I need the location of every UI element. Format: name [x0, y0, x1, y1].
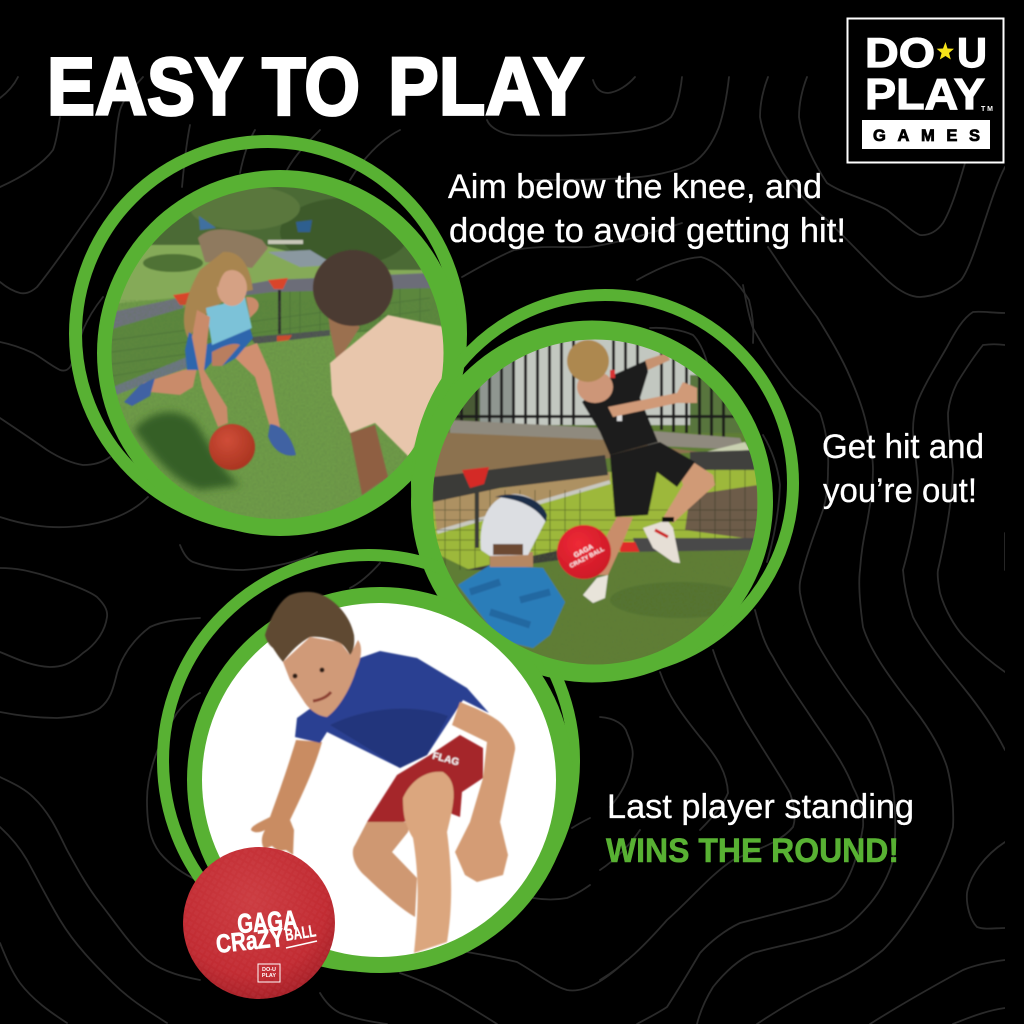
- text: aim below the knee: Aim below the knee, and: [448, 168, 822, 206]
- girl hair back: [184, 252, 253, 338]
- man neck: [328, 318, 360, 358]
- bottom outer ring: [163, 555, 574, 966]
- back arm: [251, 740, 322, 855]
- shorts: [367, 735, 483, 822]
- back leg: [353, 822, 417, 917]
- net: [108, 287, 445, 392]
- foreground grass: [117, 335, 330, 396]
- panel: boy dodging photo: [430, 330, 770, 670]
- hair: [265, 592, 354, 662]
- shorts: [610, 442, 695, 517]
- panel: boy dodging photo: GAGA: [573, 544, 595, 560]
- text: last player standing: [606, 788, 914, 870]
- logo: PLAY: [865, 70, 985, 119]
- cap: [481, 494, 546, 556]
- grass grain: [114, 300, 360, 394]
- band: [433, 455, 608, 502]
- photo scene: [112, 187, 444, 519]
- logo: [848, 18, 1004, 162]
- text: last player standing: WINS THE ROUND!: [606, 832, 899, 870]
- icon: gaga crazy ball: PLAY: [262, 973, 276, 979]
- front leg: [403, 772, 454, 953]
- girl front leg: [230, 343, 280, 427]
- shorts: [185, 328, 253, 370]
- icon: gaga crazy ball: CRaZY: [214, 922, 285, 959]
- grass: [532, 550, 750, 570]
- boy back leg: [597, 517, 633, 575]
- ball: [557, 525, 611, 579]
- man hair: [313, 250, 393, 326]
- logo: U: [957, 29, 987, 76]
- cups: [173, 292, 192, 305]
- white circle: [202, 603, 556, 957]
- boy figure: [251, 592, 515, 953]
- mulch: [430, 432, 700, 480]
- boy figure: FLAG: [431, 751, 460, 768]
- shadow: [134, 412, 240, 490]
- text: get hit: [822, 428, 984, 510]
- shirt: [582, 360, 658, 455]
- face: [283, 637, 361, 717]
- rings: dodge photo and bottom photo: [163, 295, 793, 973]
- logo: DO: [865, 29, 935, 76]
- net area: [432, 468, 758, 570]
- top: [206, 297, 252, 345]
- tee: [295, 651, 489, 768]
- dodge outer ring: [417, 295, 793, 671]
- outer ring: [76, 142, 460, 526]
- face: [217, 270, 247, 306]
- icon: gaga crazy ball: DO-U: [262, 967, 276, 973]
- panel: boy dodging photo: CRAZY BALL: [569, 546, 606, 570]
- shoes: [124, 378, 155, 406]
- text: get hit: you’re out!: [823, 472, 977, 510]
- cap boy shirt: [458, 565, 565, 648]
- icon: gaga crazy ball: [183, 847, 335, 999]
- title: EASY: [47, 42, 243, 132]
- fence: [514, 340, 698, 426]
- fence band: [108, 297, 183, 330]
- arms: [645, 353, 670, 370]
- text: last player standing: Last player standing: [607, 788, 914, 826]
- head: [577, 371, 613, 403]
- ball: [209, 424, 255, 470]
- title: TO: [262, 42, 360, 132]
- man shirt: [330, 315, 445, 458]
- lawn: [120, 244, 423, 304]
- arm: [192, 310, 228, 427]
- front arm: [452, 702, 515, 882]
- bottom inner ring: [187, 587, 573, 973]
- icon: gaga crazy ball: BALL: [284, 921, 317, 945]
- text: aim below the knee: dodge to avoid getting hit!: [449, 212, 846, 250]
- boy front leg: [663, 462, 715, 523]
- man arm: [350, 425, 388, 495]
- sidewalk: [450, 420, 745, 450]
- inner ring: [97, 170, 463, 536]
- logo: GAMES: [873, 127, 980, 145]
- text: aim below the knee: [448, 168, 846, 250]
- title: PLAY: [388, 42, 584, 132]
- icon: gaga crazy ball: GAGA: [236, 905, 298, 939]
- panel: girl with ball photo: [76, 142, 463, 536]
- rock: [198, 230, 268, 268]
- girl rear leg: [143, 368, 197, 395]
- title: [47, 42, 584, 132]
- dodge inner ring: [411, 320, 773, 682]
- logo: TM: [981, 106, 993, 113]
- text: get hit: Get hit and: [822, 428, 984, 466]
